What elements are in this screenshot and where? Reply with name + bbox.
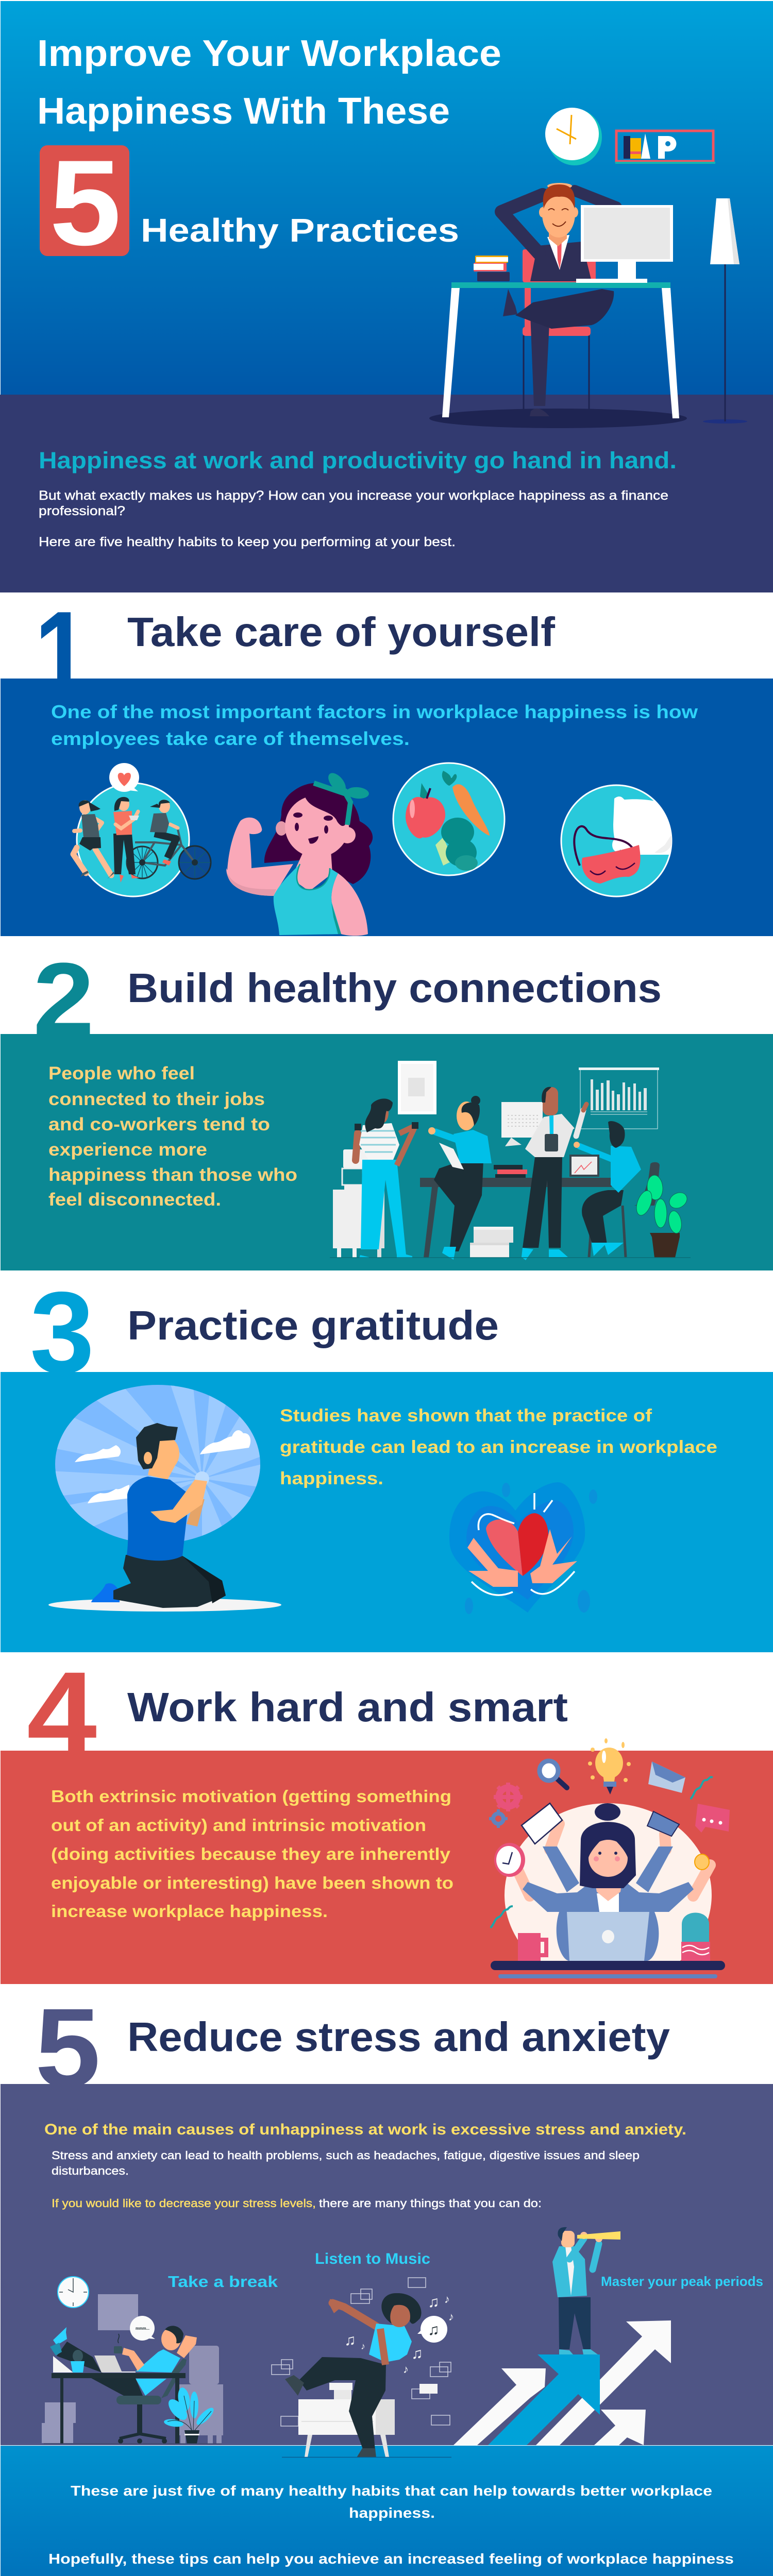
panel text: employees take care of themselves. (51, 728, 410, 749)
body text (52, 2149, 640, 2210)
heading: Work hard and smart (127, 1684, 568, 1730)
heading: Reduce stress and anxiety (127, 2014, 670, 2060)
speech bubble mmm (130, 2316, 155, 2341)
panel text: and co-workers tend to (48, 1114, 270, 1134)
floor lamp (703, 198, 747, 423)
desk (442, 282, 679, 418)
music notes: ♫ (411, 2345, 423, 2362)
sleep mask (582, 845, 641, 884)
desk shelf (491, 1961, 725, 1978)
footer text (48, 2483, 734, 2576)
leaves (442, 771, 457, 786)
intro text: But what exactly makes us happy? How can you increase your workplace happiness as a finance (39, 488, 668, 503)
illustration: man with telescope on arrows (453, 2227, 671, 2445)
sun burst (55, 1385, 260, 1541)
panel text: Studies have shown that the practice of (280, 1406, 652, 1426)
paper stacks (42, 2402, 76, 2443)
heading: Build healthy connections (127, 965, 662, 1011)
speech bubble with heart (109, 763, 139, 792)
illustration: praying man in sun rays (48, 1376, 281, 1612)
illustration: team meeting (330, 1061, 691, 1260)
section 5: reduce stress and anxiety (1, 1986, 773, 2445)
laptop (567, 1912, 649, 1961)
speech bubble with note (417, 2316, 447, 2343)
mug (518, 1933, 546, 1961)
subheading: One of the main causes of unhappiness at work is excessive stress and anxiety. (44, 2121, 686, 2138)
tank top (274, 864, 341, 935)
chair (589, 1162, 660, 1257)
panel text: gratitude can lead to an increase in workplace (280, 1437, 717, 1457)
footer text: These are just five of many healthy habits that can help towards better workplace (71, 2483, 712, 2499)
cyclist (150, 800, 178, 866)
music notes: ♪ (448, 2310, 454, 2323)
panel text (51, 701, 698, 749)
panel text: happiness than those who (48, 1165, 297, 1185)
circle: healthy food (393, 763, 505, 875)
neck (291, 850, 332, 891)
number five badge: 5 (49, 135, 121, 271)
ground line (330, 1257, 691, 1258)
illustration: man taking a break (42, 2277, 223, 2444)
illustration: relaxed man at desk (429, 108, 747, 428)
broccoli (435, 837, 453, 866)
arms raised (515, 1824, 710, 1896)
intro band (0, 395, 773, 592)
label: take a break: Take a break (168, 2273, 278, 2291)
intro text: professional? (39, 504, 125, 518)
music notes: ♪ (403, 2363, 409, 2376)
potted plant (163, 2386, 216, 2444)
panel text: People who feel (48, 1063, 195, 1083)
panel text (51, 1787, 453, 1921)
framed picture (398, 1061, 436, 1114)
hair (264, 783, 373, 884)
paper on wall (501, 1102, 543, 1146)
panel text: enjoyable or interesting) have been shown to (51, 1873, 453, 1892)
floating squares (272, 2278, 451, 2426)
wall shelf (615, 131, 715, 164)
panel (1, 679, 773, 936)
section 1: take care of yourself (1, 586, 773, 936)
illustration: hands holding heart (449, 1482, 597, 1614)
envelope (648, 1761, 685, 1793)
body text: Stress and anxiety can lead to health problems, such as headaches, fatigue, digestive issues and sleep (52, 2149, 640, 2162)
cactus plant (681, 1912, 710, 1961)
light bulb (588, 1738, 631, 1794)
hero background (1, 1, 773, 395)
title: Happiness With These (37, 91, 450, 132)
computer monitor (576, 205, 673, 283)
man reclining (50, 2326, 197, 2396)
bicycle (127, 829, 211, 879)
music notes: ♪ (444, 2293, 450, 2306)
title: Improve Your Workplace (37, 33, 501, 74)
apple (406, 797, 445, 838)
section 2: build healthy connections (1, 942, 773, 1270)
number 2: 2 (33, 942, 94, 1057)
music notes (344, 2293, 454, 2376)
title: Healthy Practices (141, 212, 459, 249)
hair back and torso (523, 1803, 694, 1961)
circle: exercise, food and cycling (73, 763, 211, 896)
arrows (453, 2320, 671, 2445)
papers (53, 2356, 73, 2372)
man (91, 1423, 226, 1608)
panel text: experience more (48, 1140, 207, 1160)
magnifying glass (540, 1761, 567, 1788)
panel text: Both extrinsic motivation (getting something (51, 1787, 451, 1806)
music notes: ♫ (344, 2332, 356, 2349)
wall clock (58, 2277, 89, 2308)
number 1: 1 (35, 586, 89, 721)
chair (523, 249, 596, 412)
panel text (48, 1063, 297, 1210)
coin (695, 1854, 709, 1870)
panel text: (doing activities because they are inherently (51, 1844, 451, 1863)
headband and bow (314, 770, 369, 825)
body text: If you would like to decrease your stress levels, (52, 2197, 316, 2210)
right arm (331, 873, 368, 936)
label: listen to music: Listen to Music (315, 2250, 430, 2267)
footer section (0, 2445, 773, 2576)
ground line (44, 2443, 222, 2444)
illustration: woman dancing to music (272, 2278, 454, 2458)
chair (116, 2359, 187, 2444)
table (420, 1178, 612, 1258)
panel text: happiness. (280, 1469, 383, 1488)
speech bubble with note: ♫ (428, 2321, 439, 2338)
panel text: connected to their jobs (48, 1089, 265, 1109)
body text: there are many things that you can do: (319, 2197, 542, 2210)
clouds (75, 1430, 250, 1503)
ground line (282, 2456, 451, 2458)
panel text: out of an activity) and intrinsic motivation (51, 1816, 426, 1835)
laptop (94, 2355, 136, 2372)
hero section (0, 1, 773, 592)
cabinet (298, 2383, 395, 2457)
body text: disturbances. (52, 2164, 129, 2177)
footer text: Hopefully, these tips can help you achieve an increased feeling of workplace happiness (48, 2551, 734, 2567)
section 3: practice gratitude (1, 1267, 773, 1652)
man (501, 183, 616, 416)
ground ellipse (48, 1598, 281, 1612)
title (37, 33, 501, 249)
seated man (574, 1121, 641, 1256)
panel (1, 1034, 773, 1270)
panel text: increase workplace happiness. (51, 1902, 328, 1921)
woman with coffee (355, 1098, 418, 1258)
woman with notes (428, 1096, 492, 1260)
panel (1, 2084, 773, 2445)
footer background (1, 2446, 773, 2576)
wall clock (545, 108, 602, 165)
footer text: happiness. (349, 2505, 435, 2521)
strong woman flexing (226, 770, 373, 936)
speech bubble mmm: mmm... (136, 2326, 149, 2331)
intro text: Here are five healthy habits to keep you performing at your best. (39, 535, 456, 549)
filing cabinet and water cooler (333, 1149, 384, 1258)
number 3: 3 (30, 1267, 94, 1397)
panel (1, 1372, 773, 1652)
woman with salad (113, 797, 139, 883)
face (276, 821, 287, 836)
label: master your peak periods: Master your peak periods (601, 2274, 763, 2289)
potted plant (633, 1175, 690, 1258)
panel text: feel disconnected. (48, 1190, 221, 1210)
alarm clock (494, 1843, 525, 1877)
stack of books (474, 256, 510, 281)
background arch (505, 1803, 712, 1961)
bar chart poster (579, 1067, 659, 1129)
carrot (452, 784, 490, 836)
runner (73, 800, 114, 879)
cactus (71, 2350, 85, 2372)
divider (0, 2445, 773, 2446)
books on table (494, 1165, 527, 1178)
number 5: 5 (35, 1986, 100, 2111)
calendar (98, 2294, 138, 2330)
section 4: work hard and smart (1, 1647, 773, 1987)
man with phone (522, 1087, 586, 1260)
squiggles (491, 1777, 713, 1928)
telescope (577, 2231, 620, 2240)
laptop (569, 1155, 599, 1177)
storage boxes (470, 1227, 513, 1258)
man (552, 2227, 620, 2354)
heading: Take care of yourself (127, 609, 555, 655)
gears (489, 1783, 523, 1828)
panel text: One of the most important factors in workplace happiness is how (51, 701, 698, 722)
music notes: ♪ (361, 2341, 365, 2351)
cooler and cabinet (179, 2346, 223, 2444)
floor shadow (429, 409, 687, 428)
woman (285, 2293, 422, 2458)
number 4: 4 (27, 1647, 97, 1780)
music notes: ♫ (428, 2294, 439, 2311)
illustration: multitasking woman (489, 1738, 730, 1987)
panel text (280, 1406, 717, 1488)
heading: Practice gratitude (127, 1302, 499, 1348)
raised arm (226, 818, 293, 896)
circle: sleep mask and pillow (561, 785, 680, 896)
intro heading: Happiness at work and productivity go hand in hand. (39, 447, 677, 473)
clipboard (522, 1803, 562, 1844)
desk (52, 2373, 186, 2444)
panel (1, 1751, 773, 1984)
phone (647, 1811, 679, 1836)
intro text (39, 488, 668, 549)
chat bubble (695, 1804, 730, 1833)
